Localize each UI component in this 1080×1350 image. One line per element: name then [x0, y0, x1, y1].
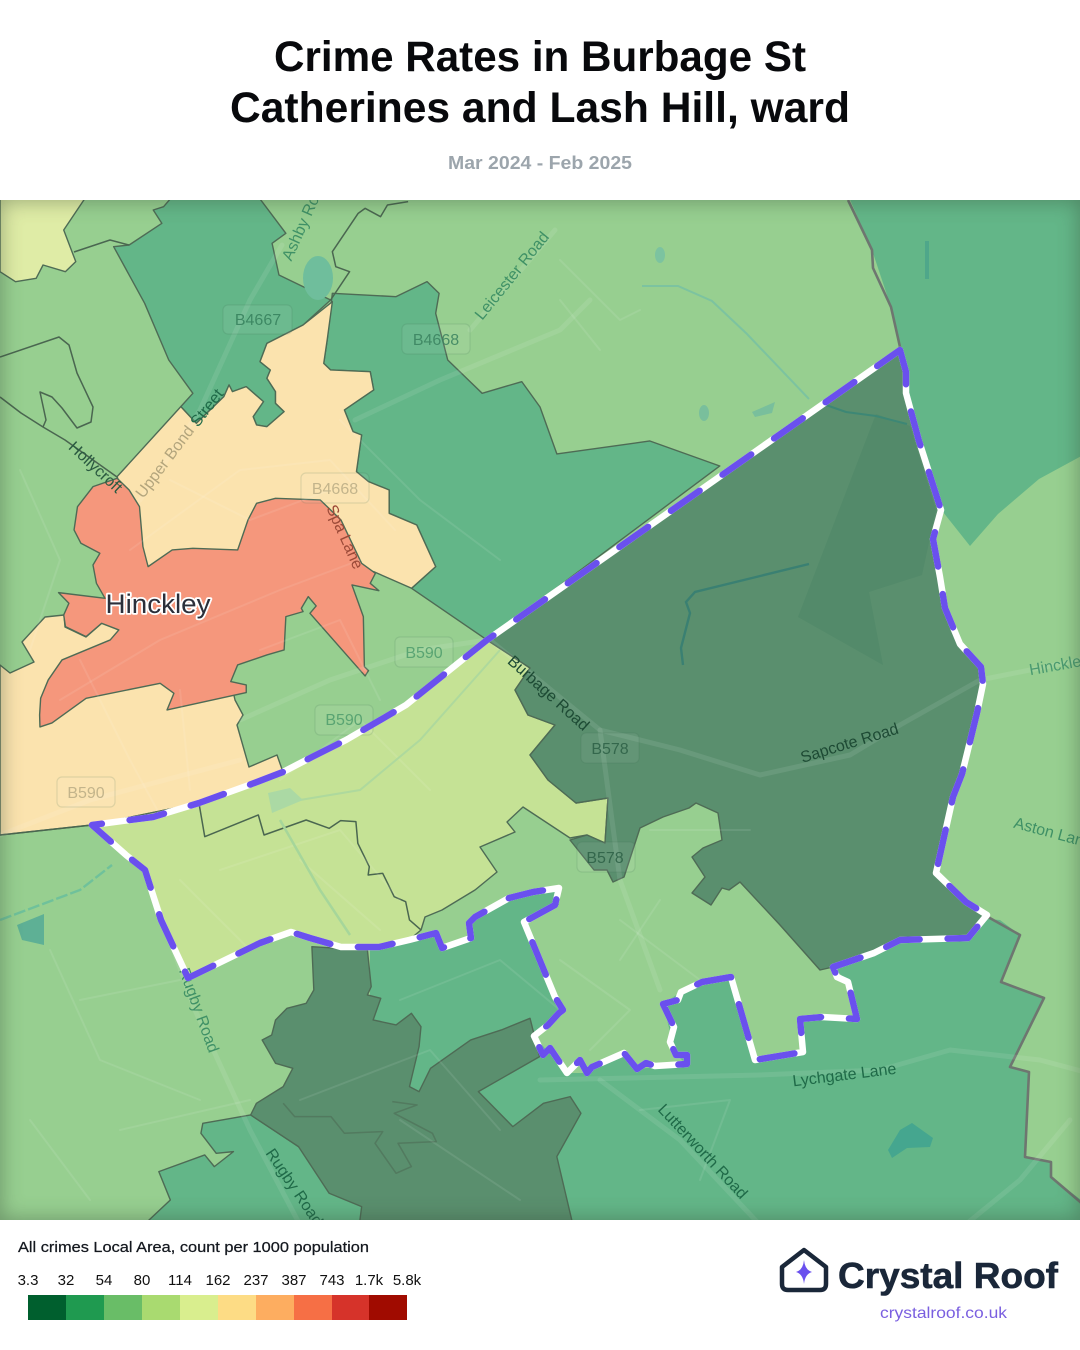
waterways and ponds [0, 241, 933, 1158]
road number chips: B4668 [312, 481, 358, 498]
road number chips: B4667 [235, 312, 281, 329]
legend scale labels: 387 [281, 1272, 307, 1289]
street labels: Rugby Road [262, 1146, 326, 1229]
title [230, 33, 850, 132]
legend title: All crimes Local Area, count per 1000 population [18, 1239, 369, 1256]
legend scale labels: 114 [168, 1272, 192, 1289]
road number chips [57, 305, 639, 872]
area: pale yellow-green top-left [0, 197, 86, 282]
area: mid green south-west patch [148, 1114, 361, 1220]
boundary lines: thick council border [848, 200, 1080, 1206]
legend scale labels: 237 [243, 1272, 269, 1289]
boundary lines: thin area borders [0, 202, 436, 1173]
street labels: Sapcote Road [799, 721, 901, 767]
place label: Hinckley: Hinckley [106, 589, 211, 619]
map panel [0, 177, 1080, 1229]
area: mid green north-east [848, 195, 1080, 546]
area: dark green east of ward [487, 347, 987, 970]
legend scale labels: 5.8k [393, 1272, 422, 1289]
area: ward interior light green [416, 880, 853, 1073]
area: darker woodland patch [798, 414, 936, 665]
area: dark green south [251, 947, 581, 1222]
area: yellow-green inside ward [92, 640, 608, 978]
street labels: Upper Bond [133, 423, 198, 502]
road network [0, 230, 1080, 1225]
legend scale labels: 32 [58, 1272, 74, 1289]
legend scale labels [18, 1272, 422, 1289]
street labels: Lutterworth Road [654, 1101, 750, 1203]
street labels [65, 177, 1080, 1229]
area: mid green north of Hinckley [114, 197, 331, 427]
logo icon: house with star [782, 1250, 826, 1290]
street labels: Burbage Road [504, 653, 592, 734]
legend scale labels: 54 [96, 1272, 112, 1289]
area: mid green south [370, 880, 1080, 1225]
street labels: Hollycroft [65, 439, 126, 497]
road number chips: B578 [586, 850, 624, 867]
subtitle: date range: Mar 2024 - Feb 2025 [448, 153, 632, 173]
area: pale orange south-west Hinckley [0, 615, 283, 835]
street labels: Rugby Road [175, 966, 221, 1055]
area: mid green east of Hinckley [324, 282, 720, 640]
logo wordmark: Crystal Roof [838, 1255, 1059, 1296]
legend scale labels: 1.7k [355, 1272, 384, 1289]
legend colour bar [28, 1295, 407, 1320]
legend scale labels: 80 [134, 1272, 150, 1289]
legend scale labels: 3.3 [18, 1272, 38, 1289]
title: Crime Rates in Burbage St [274, 33, 806, 81]
street labels: Leicester Road [472, 229, 553, 323]
street labels: Street [188, 386, 228, 430]
road number chips: B590 [405, 645, 443, 662]
road number chips: B4668 [413, 332, 459, 349]
area: pale orange north Hinckley [117, 302, 436, 588]
legend scale labels: 743 [319, 1272, 345, 1289]
road number chips: B590 [325, 712, 363, 729]
road number chips: B578 [591, 741, 629, 758]
area: red central Hinckley [40, 478, 379, 727]
street labels: Lychgate Lane [792, 1061, 897, 1090]
legend scale labels: 162 [205, 1272, 231, 1289]
ward boundary [92, 350, 987, 1073]
road number chips: B590 [67, 785, 105, 802]
street labels: Ashby Road [279, 177, 330, 263]
title: Catherines and Lash Hill, ward [230, 84, 850, 132]
street labels: Spa Lane [322, 502, 366, 572]
logo url: crystalroof.co.uk [880, 1305, 1008, 1322]
